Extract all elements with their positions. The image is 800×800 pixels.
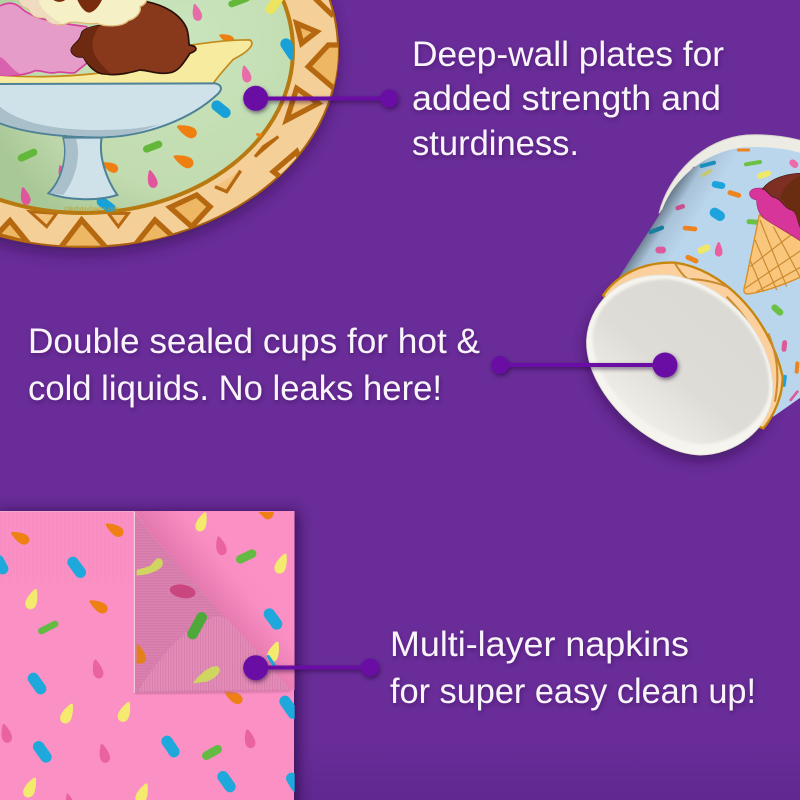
- panel: plate: [0, 0, 343, 254]
- cup rim: [659, 135, 800, 213]
- panel: napkin: [0, 511, 299, 800]
- pink ice cream scoop: [0, 3, 87, 75]
- banana: [0, 40, 252, 85]
- whipped cream: [18, 0, 147, 26]
- callout dot: plate: [243, 86, 398, 111]
- cup sprinkles: [651, 150, 797, 400]
- text: plates: Deep-wall plates for: [412, 35, 724, 74]
- bowl stem: [48, 138, 117, 199]
- text: napkins: for super easy clean up!: [390, 672, 756, 711]
- callout dot: napkin: [243, 655, 379, 680]
- napkin sprinkles: [0, 520, 297, 800]
- icon: ice cream cone: [744, 173, 800, 294]
- napkin fold: flap: [134, 511, 295, 691]
- cup bottom: [587, 275, 773, 455]
- text: napkins: [390, 625, 756, 711]
- text: cups: [28, 322, 480, 408]
- text: plates: sturdiness.: [412, 124, 579, 163]
- text: plates: [412, 35, 724, 163]
- text: cups: Double sealed cups for hot &: [28, 322, 480, 361]
- text: cups: cold liquids. No leaks here!: [28, 369, 442, 408]
- text: napkins: Multi-layer napkins: [390, 625, 689, 664]
- icon: banana split illustration: [0, 0, 252, 199]
- chocolate ice cream scoop: [71, 2, 196, 75]
- bowl: [0, 83, 221, 137]
- cup waffle band: [603, 263, 783, 428]
- chocolate sauce: [77, 0, 103, 13]
- copyright mark: ©BirthdayGalore.com: [64, 206, 119, 213]
- callout dot: cup: [491, 352, 678, 378]
- text: plates: added strength and: [412, 79, 721, 118]
- napkin fold: exposed triangle: [134, 512, 291, 694]
- plate sprinkles: [18, 0, 293, 208]
- panel: cup: [587, 135, 800, 460]
- cup body: [600, 147, 800, 417]
- ice cream scoop on cone: [750, 173, 800, 242]
- chocolate topping: [762, 173, 800, 230]
